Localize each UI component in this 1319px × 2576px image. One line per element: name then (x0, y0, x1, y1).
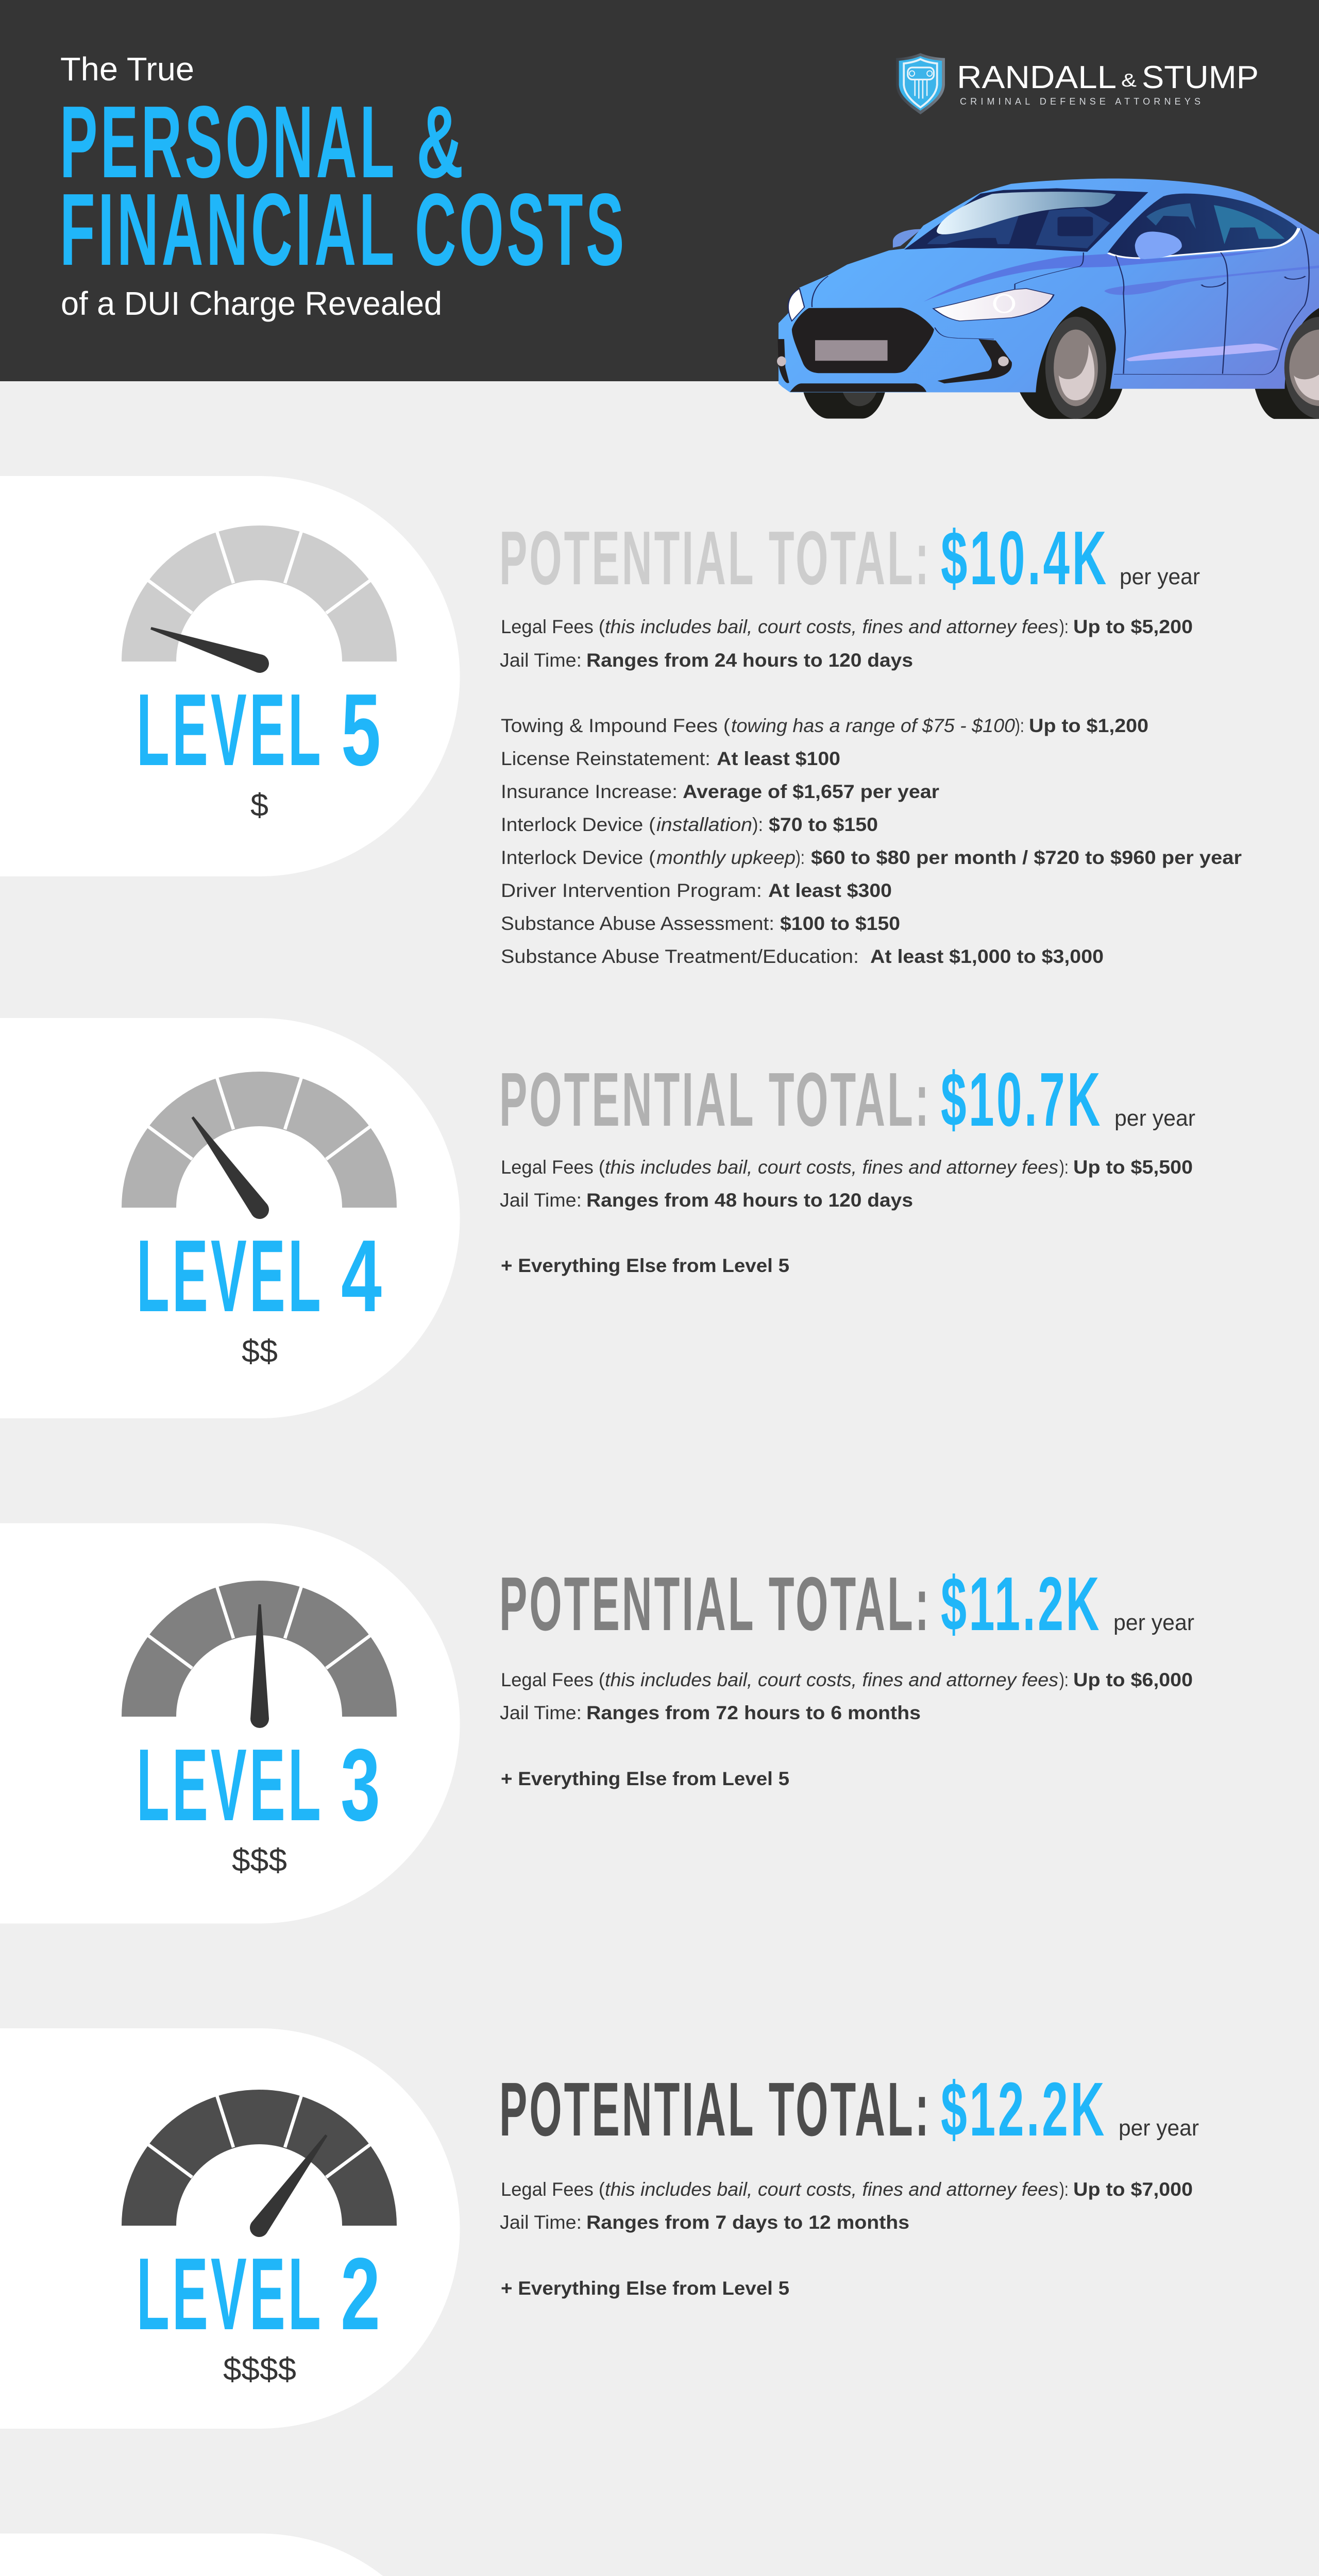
heading: personal and financial costs (60, 85, 627, 287)
gauge: level 5 (122, 526, 397, 675)
cost list: Jail Time: (500, 1702, 582, 1723)
icon: shield (896, 53, 945, 114)
subheading: of a DUI Charge Revealed (61, 285, 442, 322)
potential total heading: per year (1113, 1610, 1194, 1635)
rear wheel (1255, 308, 1319, 419)
level 5 label: 5 (341, 673, 384, 787)
cost list: Legal Fees ( (501, 1669, 605, 1690)
level 3 label (137, 1728, 384, 1842)
heading: personal and financial costs: & (416, 85, 467, 199)
cost list: License Reinstatement: (501, 748, 711, 769)
cost list: ): (752, 814, 763, 835)
text: level 1 costs (499, 2571, 1199, 2576)
cost list: ): (1059, 2179, 1069, 2200)
logo wordmark (957, 60, 1259, 107)
windshield (904, 188, 1148, 252)
text: level 4 costs (499, 1057, 1195, 1276)
potential total heading: POTENTIAL TOTAL: (499, 1057, 931, 1142)
level 5 label (137, 673, 384, 787)
needle (250, 1604, 269, 1728)
cost list: Insurance Increase: (501, 781, 678, 802)
level 2 label (137, 2237, 384, 2351)
bumper details (790, 383, 926, 392)
level 5 card (0, 476, 460, 876)
cost list (500, 616, 1242, 967)
level 4 label (137, 1219, 385, 1333)
heading: personal and financial costs: PERSONAL (60, 85, 397, 199)
blue body streaks (923, 250, 1270, 302)
logo: header (896, 53, 1259, 114)
cost list: Up to $5,200 (1073, 616, 1193, 637)
cost list: ): (1015, 715, 1024, 736)
potential total heading: POTENTIAL TOTAL: (499, 1562, 931, 1647)
cost list: At least $100 (717, 748, 840, 769)
cost list: Ranges from 72 hours to 6 months (586, 1702, 921, 1723)
potential total heading: $12.2K (941, 2067, 1107, 2152)
cost list: Jail Time: (500, 2212, 582, 2233)
cost list: ): (796, 847, 805, 868)
cost list: Legal Fees ( (501, 2179, 605, 2200)
level 4 card (0, 1018, 460, 1418)
logo wordmark: RANDALL (957, 60, 1117, 95)
cost list: this includes bail, court costs, fines and attorney fees (605, 1669, 1058, 1690)
cost list: ): (1059, 1157, 1069, 1178)
cost list: Up to $6,000 (1073, 1669, 1193, 1690)
cost list: $60 to $80 per month / $720 to $960 per year (811, 847, 1242, 868)
panel: header background (0, 0, 1319, 381)
cost list: installation (656, 814, 752, 835)
cost list: this includes bail, court costs, fines and attorney fees (605, 2179, 1058, 2200)
level 2 label: LEVEL (137, 2237, 324, 2351)
cost list: Ranges from 7 days to 12 months (586, 2212, 909, 2233)
side mirror (893, 229, 921, 248)
panel: level 2 (0, 2028, 460, 2429)
cost list: Substance Abuse Treatment/Education: (501, 946, 859, 967)
potential total heading: $11.2K (941, 1562, 1102, 1647)
cost rating: $$ (242, 1334, 278, 1369)
logo wordmark: STUMP (1142, 60, 1259, 95)
cost list: Up to $1,200 (1029, 715, 1148, 736)
level 3 card (0, 1523, 460, 1924)
cost list: Ranges from 48 hours to 120 days (586, 1190, 913, 1211)
heading: personal and financial costs: COSTS (415, 173, 627, 287)
potential total heading: $10.4K (941, 516, 1109, 601)
potential total heading: POTENTIAL TOTAL: (499, 2067, 931, 2152)
cost list: Legal Fees ( (501, 616, 605, 637)
body lines (812, 228, 1309, 375)
panel: level 1 (0, 2534, 460, 2576)
cost rating: $$$$ (223, 2352, 296, 2387)
cost list: this includes bail, court costs, fines and attorney fees (605, 1157, 1058, 1178)
cost list: ): (1059, 616, 1069, 637)
potential total heading: per year (1119, 2115, 1199, 2141)
cost list: Jail Time: (500, 650, 582, 671)
licence plate (815, 340, 888, 361)
cost rating: $ (250, 788, 268, 823)
potential total heading: $10.7K (941, 1057, 1103, 1142)
cost list: Substance Abuse Assessment: (501, 913, 774, 934)
cost list: At least $300 (768, 880, 892, 901)
panel: level 5 (0, 476, 460, 876)
grille (792, 308, 934, 373)
level 3 label: 3 (341, 1728, 384, 1842)
front wheel (1020, 306, 1122, 419)
cost list: Up to $7,000 (1073, 2179, 1193, 2200)
logo wordmark: CRIMINAL DEFENSE ATTORNEYS (960, 96, 1200, 107)
cost list: Jail Time: (500, 1190, 582, 1211)
level 4 label: 4 (341, 1219, 385, 1333)
level 2 card (0, 2028, 460, 2429)
cost list (500, 2179, 1193, 2299)
heading: personal and financial costs: FINANCIAL (60, 173, 397, 287)
text: level 5 costs (499, 516, 1242, 967)
gauge: level 4 (122, 1072, 397, 1223)
headlights (933, 289, 1054, 321)
potential total heading: per year (1120, 564, 1200, 589)
cost list: $100 to $150 (780, 913, 900, 934)
title block (60, 50, 627, 322)
gauge: level 2 (122, 2090, 397, 2241)
cost list: this includes bail, court costs, fines and attorney fees (605, 616, 1058, 637)
side window (1108, 194, 1297, 258)
potential total heading: per year (1114, 1106, 1195, 1131)
level 3 label: LEVEL (137, 1728, 324, 1842)
cost list: + Everything Else from Level 5 (501, 1768, 789, 1789)
cost list (500, 1669, 1193, 1789)
cost list (500, 1157, 1193, 1276)
needle (148, 619, 272, 675)
car body (779, 178, 1319, 392)
cost list: Interlock Device ( (501, 814, 656, 835)
cost list: At least $1,000 to $3,000 (870, 946, 1104, 967)
cost list: + Everything Else from Level 5 (501, 1255, 789, 1276)
cost rating: $$$ (232, 1843, 287, 1878)
level 2 label: 2 (341, 2237, 384, 2351)
panel: level 4 (0, 1018, 460, 1418)
front left tyre (803, 392, 885, 418)
potential total heading: POTENTIAL TOTAL: (499, 516, 931, 601)
panel: level 3 (0, 1523, 460, 1924)
text: level 3 costs (499, 1562, 1194, 1789)
cost list: towing has a range of $75 - $100 (731, 715, 1015, 736)
level 5 label: LEVEL (137, 673, 324, 787)
cost list: Ranges from 24 hours to 120 days (586, 650, 913, 671)
cost list: Up to $5,500 (1073, 1157, 1193, 1178)
cost list: Legal Fees ( (501, 1157, 605, 1178)
cost list: $70 to $150 (769, 814, 878, 835)
level 4 label: LEVEL (137, 1219, 324, 1333)
gauge: level 3 (122, 1581, 397, 1728)
cost list: + Everything Else from Level 5 (501, 2278, 789, 2299)
needle (246, 2130, 334, 2241)
needle (185, 1112, 273, 1223)
cost list: monthly upkeep (656, 847, 796, 868)
heading: the true: The True (60, 50, 194, 88)
text: level 2 costs (499, 2067, 1199, 2299)
cost list: ): (1059, 1669, 1069, 1690)
illustration: blue car (777, 178, 1319, 419)
cost list: Average of $1,657 per year (683, 781, 939, 802)
cost list: Towing & Impound Fees ( (501, 715, 731, 736)
level 1 card (0, 2534, 460, 2576)
logo wordmark: & (1121, 70, 1137, 91)
cost list: Driver Intervention Program: (501, 880, 762, 901)
cost list: Interlock Device ( (501, 847, 656, 868)
